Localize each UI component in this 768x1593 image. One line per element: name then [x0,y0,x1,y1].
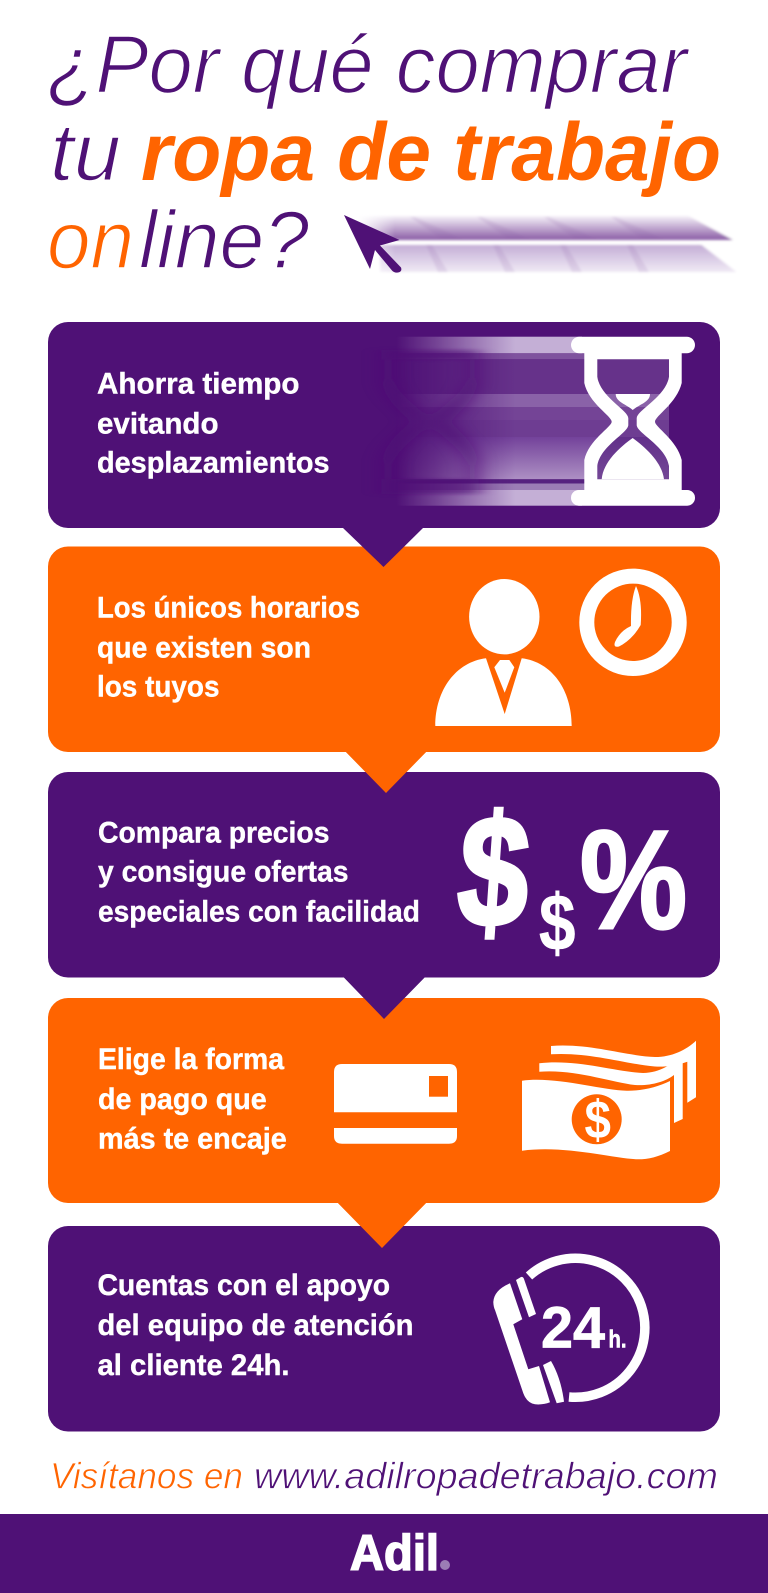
icon: clock [587,576,679,668]
text: horarios: Los únicos horarios [97,591,360,624]
panel: forma de pago [48,977,720,1248]
panel: precios [48,751,720,1019]
icon: motion-blurred cursor arrow [344,215,734,273]
panel: ahorra tiempo [48,322,720,528]
call to action: website: Visítanos en [50,1455,243,1496]
text: horarios: los tuyos [97,671,220,704]
icon: banknotes [522,1041,696,1159]
title: line? [139,195,309,286]
text: forma de pago: de pago que [98,1083,267,1116]
title: ¿Por qué comprar [47,20,691,111]
call to action: website [50,1455,718,1496]
text: atención 24h: Cuentas con el apoyo [98,1269,390,1302]
text: ahorra tiempo: evitando [97,407,218,440]
text: horarios: que existen son [97,632,311,665]
icon: dollar and percent: $ [453,784,535,960]
text: forma de pago: más te encaje [98,1122,287,1155]
text: precios: y consigue ofertas [98,856,348,889]
text: atención 24h [98,1269,414,1382]
text: forma de pago: Elige la forma [98,1043,285,1076]
panel: atención 24h [48,1202,720,1432]
icon: hourglass with motion blur [381,337,695,506]
text: forma de pago [98,1043,287,1155]
icon: dollar and percent [453,784,687,967]
title: on [47,195,134,286]
panel: horarios [48,528,720,793]
icon: banknotes: $ [584,1089,611,1150]
text: ahorra tiempo: Ahorra tiempo [97,367,300,400]
icon: person [435,579,572,726]
text: ahorra tiempo [97,367,330,480]
icon: credit card [334,1064,457,1144]
text: precios: Compara precios [98,816,330,849]
title: tu [50,107,121,198]
call to action: website: www.adilropadetrabajo.com [254,1455,718,1496]
text: atención 24h: al cliente 24h. [98,1349,290,1382]
text: atención 24h: del equipo de atención [98,1309,414,1342]
text: precios: especiales con facilidad [98,896,420,929]
icon: telephone 24h: 24 [541,1295,605,1360]
text: horarios [97,591,360,704]
text: ahorra tiempo: desplazamientos [97,447,330,480]
footer bar with logo [0,1514,768,1593]
logo: Adil: Adil [350,1525,439,1581]
title: ropa de trabajo [141,107,721,198]
icon: telephone 24h [493,1258,645,1404]
icon: telephone 24h: h. [608,1325,626,1353]
icon: dollar and percent: % [580,801,687,958]
title [47,20,721,286]
text: precios [98,816,420,929]
icon: dollar and percent: $ [539,878,575,967]
